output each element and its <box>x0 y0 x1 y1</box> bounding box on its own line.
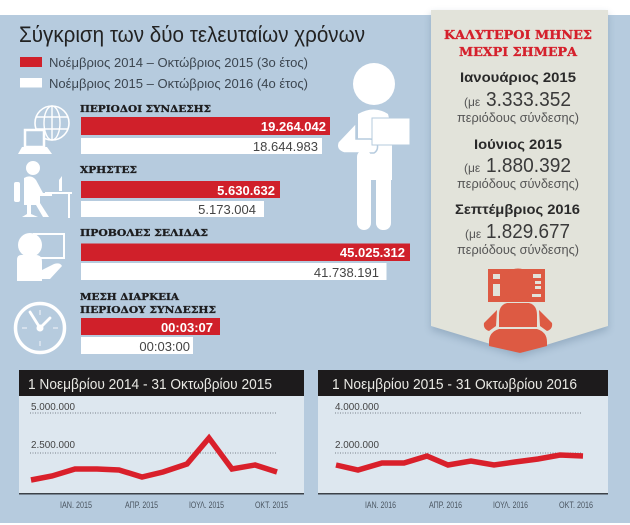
metric: sessions: ΠΕΡΙΟΔΟΙ ΣΥΝΔΕΣΗΣ <box>80 104 211 115</box>
metric: sessions <box>80 104 330 154</box>
best month: September 2016 <box>455 201 580 257</box>
chart header: 1 Νοεμβρίου 2015 - 31 Οκτωβρίου 2016 <box>332 376 577 393</box>
best month: January 2015: περιόδους σύνδεσης) <box>457 111 579 125</box>
chart: 2014-2015 sessions: 5.000.000 <box>31 402 75 413</box>
metric: users: ΧΡΗΣΤΕΣ <box>80 165 137 176</box>
chart: 2014-2015 sessions: ΙΟΥΛ. 2015 <box>189 500 224 511</box>
chart: 2014-2015 sessions: ΑΠΡ. 2015 <box>125 500 158 511</box>
panel heading: ΚΑΛΥΤΕΡΟΙ ΜΗΝΕΣ <box>444 27 592 42</box>
icon: globe and laptop <box>18 106 69 154</box>
best month: January 2015: 3.333.352 <box>486 89 571 111</box>
legend: Νοέμβριος 2015 – Οκτώβριος 2016 (4ο έτος) <box>49 76 308 91</box>
icon: person with laptop <box>337 63 410 230</box>
chart: 2014-2015 sessions: 2.500.000 <box>31 440 75 451</box>
best month: June 2015 <box>457 136 579 191</box>
best month: September 2016: Σεπτέμβριος 2016 <box>455 201 580 217</box>
metric: page views: ΠΡΟΒΟΛΕΣ ΣΕΛΙΔΑΣ <box>80 228 208 239</box>
best month: September 2016: (με <box>465 227 482 241</box>
panel heading: ΜΕΧΡΙ ΣΗΜΕΡΑ <box>459 44 577 59</box>
chart header <box>318 370 608 396</box>
chart: 2015-2016 sessions: 2.000.000 <box>335 440 379 451</box>
metric: page views: 41.738.191 <box>314 265 379 280</box>
legend <box>20 55 308 91</box>
metric: average session duration: 00:03:00 <box>139 339 190 354</box>
best month: June 2015: Ιούνιος 2015 <box>474 136 562 152</box>
best month: September 2016: 1.829.677 <box>486 221 570 243</box>
chart: 2015-2016 sessions: ΙΟΥΛ. 2016 <box>493 500 528 511</box>
best month: January 2015 <box>457 69 579 125</box>
metric: average session duration: ΠΕΡΙΟΔΟΥ ΣΥΝΔΕΣΗΣ <box>80 305 216 316</box>
panel: best months <box>431 10 608 357</box>
chart: 2014-2015 sessions <box>19 370 304 511</box>
chart: 2015-2016 sessions: 4.000.000 <box>335 402 379 413</box>
icon: person at screen <box>17 233 64 281</box>
chart: 2015-2016 sessions <box>318 370 608 511</box>
chart: 2014-2015 sessions: ΟΚΤ. 2015 <box>255 500 288 511</box>
chart header <box>19 370 304 396</box>
metric: average session duration <box>80 292 220 354</box>
icon: person at monitor <box>484 268 552 353</box>
chart header: 1 Νοεμβρίου 2014 - 31 Οκτωβρίου 2015 <box>28 376 272 393</box>
metric: average session duration: 00:03:07 <box>161 320 213 335</box>
best month: June 2015: περιόδους σύνδεσης) <box>457 177 579 191</box>
chart: 2014-2015 sessions: ΙΑΝ. 2015 <box>60 500 92 511</box>
metric: average session duration: ΜΕΣΗ ΔΙΑΡΚΕΙΑ <box>80 292 180 303</box>
best month: September 2016: περιόδους σύνδεσης) <box>457 243 579 257</box>
metric: page views: 45.025.312 <box>340 245 405 260</box>
best month: January 2015: (με <box>464 95 481 109</box>
metric: page views <box>80 228 410 280</box>
best month: January 2015: Ιανουάριος 2015 <box>460 69 576 85</box>
chart: 2015-2016 sessions: ΟΚΤ. 2016 <box>559 500 593 511</box>
metric: sessions: 19.264.042 <box>261 119 326 134</box>
icon: person at desk <box>14 161 72 218</box>
metric: sessions: 18.644.983 <box>253 139 318 154</box>
chart: 2015-2016 sessions: ΑΠΡ. 2016 <box>429 500 462 511</box>
metric: users <box>80 165 280 217</box>
data line <box>31 438 277 480</box>
best month: June 2015: 1.880.392 <box>486 155 571 177</box>
icon: clock <box>16 304 64 352</box>
metric: users: 5.173.004 <box>198 202 256 217</box>
legend: Νοέμβριος 2014 – Οκτώβριος 2015 (3ο έτος) <box>49 55 308 70</box>
panel heading <box>444 27 592 59</box>
data line <box>336 455 583 470</box>
best month: June 2015: (με <box>464 161 481 175</box>
chart: 2015-2016 sessions: ΙΑΝ. 2016 <box>365 500 396 511</box>
metric: users: 5.630.632 <box>217 183 275 198</box>
title: Σύγκριση των δύο τελευταίων χρόνων <box>19 22 365 47</box>
